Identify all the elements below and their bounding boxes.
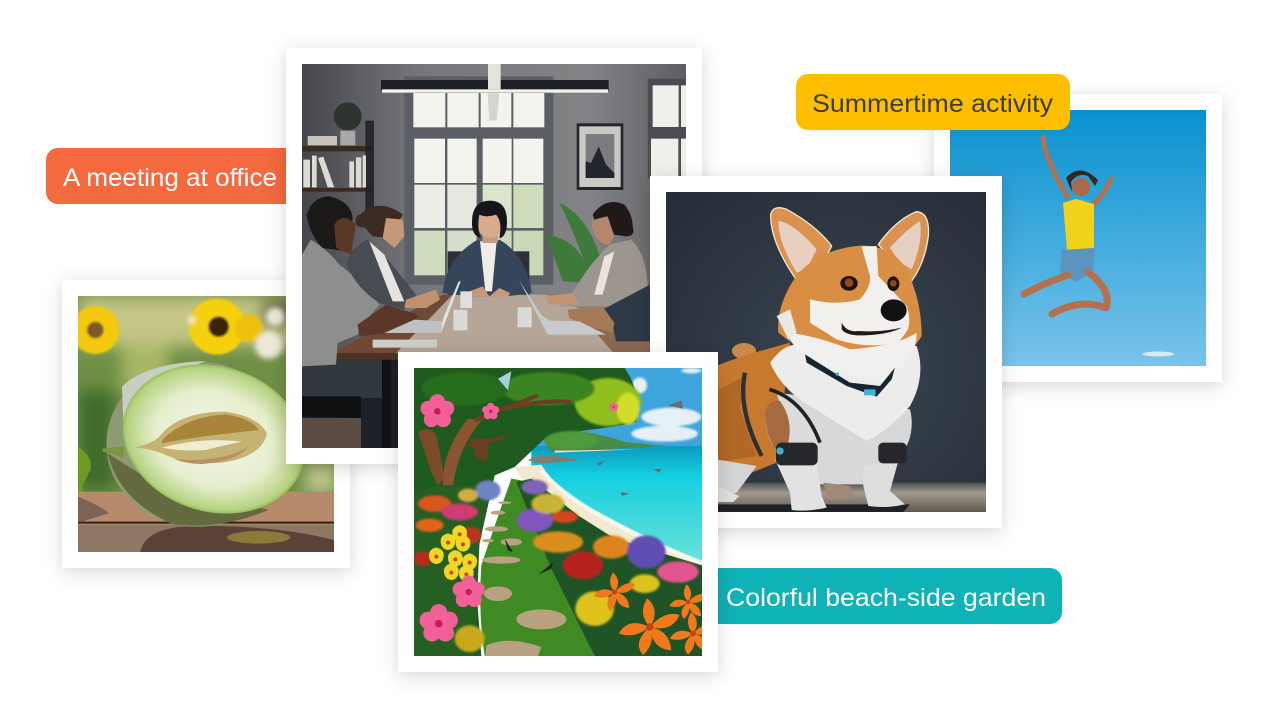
panel: corgi photo card xyxy=(650,176,1002,528)
label: a meeting at office: A meeting at office xyxy=(63,164,277,192)
chest fur xyxy=(770,345,920,441)
table xyxy=(337,294,612,353)
panel: jumping girl photo card xyxy=(934,94,1222,382)
shelf xyxy=(302,102,374,214)
eyes xyxy=(840,276,858,291)
shoulder xyxy=(765,415,790,452)
label: colorful beach-side garden: Colorful beach-side garden xyxy=(726,584,1046,612)
head xyxy=(778,245,922,350)
label: colorful beach-side garden xyxy=(700,568,1062,624)
joints xyxy=(776,443,818,465)
right flower beds xyxy=(516,479,715,656)
seed cavity xyxy=(134,412,267,463)
left flower beds xyxy=(414,480,501,656)
back legs and feet xyxy=(823,483,853,500)
label: a meeting at office xyxy=(46,148,296,204)
nose and mouth xyxy=(881,299,907,321)
table xyxy=(78,492,334,525)
person: man right xyxy=(603,285,650,341)
person: woman second from left xyxy=(347,206,440,310)
leaf xyxy=(78,446,91,492)
photo: office meeting xyxy=(302,64,686,448)
front legs xyxy=(775,459,827,511)
white face xyxy=(810,246,909,345)
flesh xyxy=(123,364,303,514)
far hills xyxy=(538,431,665,452)
label: summertime activity: Summertime activity xyxy=(812,90,1054,118)
panel: garden photo card xyxy=(398,352,718,672)
torso xyxy=(777,393,912,484)
stem xyxy=(103,447,124,458)
panel: melon photo card xyxy=(62,280,350,568)
picture on wall xyxy=(577,123,623,190)
foliage base xyxy=(414,368,637,656)
photo: melon in a sunflower garden xyxy=(71,296,335,552)
ceiling lamp xyxy=(381,64,609,121)
window xyxy=(404,76,686,285)
tail xyxy=(732,343,756,359)
rind xyxy=(106,361,268,527)
photo: beach-side flower garden xyxy=(414,368,715,656)
sea xyxy=(531,446,702,566)
photo: robotic corgi xyxy=(666,192,986,512)
hibiscus flowers xyxy=(419,394,618,642)
laptops and glasses xyxy=(373,281,606,348)
plant xyxy=(546,203,600,282)
collar xyxy=(805,354,895,397)
person: woman right xyxy=(544,202,648,306)
person: man left xyxy=(302,196,418,366)
grass path xyxy=(480,479,595,656)
photo: girl jumping in blue sky xyxy=(950,110,1206,366)
body xyxy=(718,342,790,473)
panel: meeting photo card xyxy=(286,48,702,464)
beach xyxy=(515,465,702,585)
ears xyxy=(771,208,832,283)
birds xyxy=(498,371,683,575)
tree trunks and branches xyxy=(418,429,445,485)
person: woman centre xyxy=(443,201,532,297)
label: summertime activity xyxy=(796,74,1070,130)
